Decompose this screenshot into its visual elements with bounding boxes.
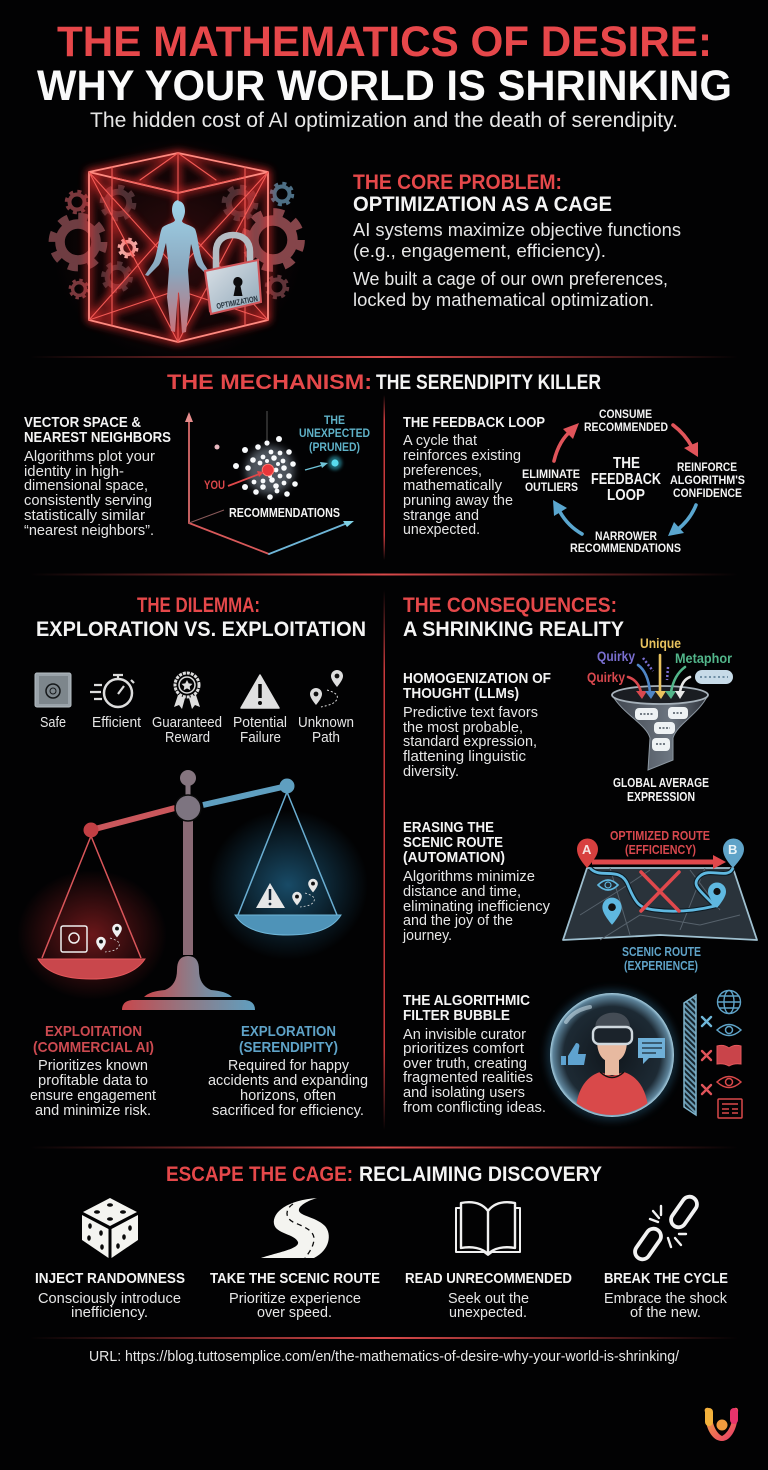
icon: blocked crosses [702, 1017, 711, 1094]
panel: algorithmic filter bubble text: over truth, creating [403, 1055, 527, 1072]
panel: homogenization of thought text: diversity. [403, 763, 459, 780]
panel: homogenization of thought text: Predictive text favors [403, 704, 538, 721]
diagram: feedback loop cycle: CONSUME [599, 407, 652, 421]
panel: vector space text: consistently serving [24, 492, 152, 509]
panel: feedback loop text [403, 414, 545, 538]
icon: safe [35, 673, 71, 731]
heading: the consequences: THE CONSEQUENCES: [403, 594, 617, 617]
panel: algorithmic filter bubble text: and isolating users [403, 1084, 525, 1101]
panel: read unrecommended: unexpected. [449, 1305, 527, 1321]
core problem body text: locked by mathematical optimization. [353, 290, 654, 310]
illustration: filter bubble [546, 989, 678, 1121]
heading: escape the cage [166, 1163, 602, 1186]
diagram: feedback loop cycle: OUTLIERS [525, 480, 578, 494]
panel: algorithmic filter bubble text: prioritizes comfort [403, 1040, 525, 1057]
panel: algorithmic filter bubble text: THE ALGORITHMIC [403, 992, 530, 1009]
heading: the dilemma: THE DILEMMA: [137, 594, 260, 617]
person in headset [575, 1013, 649, 1118]
panel: inject randomness: inefficiency. [71, 1305, 148, 1321]
panel: vector space text: “nearest neighbors”. [24, 522, 154, 539]
diagram: feedback loop cycle [522, 407, 745, 555]
panel: erasing the scenic route text [402, 819, 550, 944]
illustration: optimization cage with person and padlock [53, 138, 303, 362]
icon: warning triangle: Potential [233, 715, 287, 731]
recommendation points cluster [233, 436, 298, 500]
heading: the dilemma: EXPLORATION VS. EXPLOITATION [36, 618, 366, 641]
heading: the mechanism: THE MECHANISM: [167, 371, 372, 394]
panel: vector space text: statistically similar [24, 507, 145, 524]
panel: algorithmic filter bubble text: FILTER BUBBLE [403, 1007, 510, 1024]
panel: exploration: EXPLORATION [241, 1023, 336, 1040]
panel: erasing the scenic route text: ERASING THE [403, 819, 494, 836]
diagram: route map: (EFFICIENCY) [625, 843, 696, 857]
panel: exploitation: Prioritizes known [38, 1057, 148, 1074]
arrows: cycle [553, 423, 698, 536]
panel: inject randomness: INJECT RANDOMNESS [35, 1270, 185, 1287]
left pan: exploitation [38, 836, 145, 979]
panel: feedback loop text: pruning away the [403, 492, 513, 509]
panel: feedback loop text: THE FEEDBACK LOOP [403, 414, 545, 431]
icon: chat bubble [638, 1038, 665, 1064]
panel: exploration: (SERENDIPITY) [239, 1039, 338, 1056]
panel: algorithmic filter bubble text: from conflicting ideas. [403, 1099, 546, 1116]
panel: break the cycle: BREAK THE CYCLE [604, 1270, 728, 1287]
icon row: exploitation and exploration traits [35, 670, 354, 746]
padlock [205, 235, 261, 314]
panel: vector space text: dimensional space, [24, 477, 148, 494]
heading: the consequences: A SHRINKING REALITY [403, 618, 624, 641]
label: the unexpected pruned: UNEXPECTED [299, 426, 370, 440]
pin: A: A [582, 842, 592, 857]
label: the unexpected pruned: (PRUNED) [309, 440, 360, 454]
icon: reward ribbon: Reward [165, 730, 210, 746]
panel: erasing the scenic route text: distance and time, [403, 883, 521, 900]
logo [705, 1408, 738, 1441]
panel: vector space text: Algorithms plot your [24, 448, 155, 465]
diagram: funnel of expression: Quirky [587, 669, 625, 685]
diagram: funnel of expression: Metaphor [675, 650, 732, 666]
label: you: YOU [204, 478, 225, 492]
panel: algorithmic filter bubble text: fragmented realities [403, 1069, 533, 1086]
panel: read unrecommended [405, 1202, 572, 1321]
panel: erasing the scenic route text: journey. [402, 927, 452, 944]
title: WHY YOUR WORLD IS SHRINKING [37, 62, 732, 110]
panel: homogenization of thought text: THOUGHT (LLMs) [403, 685, 519, 702]
chart: balance scale [17, 770, 368, 1010]
diagram: funnel of expression: GLOBAL AVERAGE [613, 776, 709, 790]
diagram: feedback loop cycle: THE [613, 455, 640, 472]
panel: feedback loop text: strange and [403, 507, 479, 524]
core problem body text [353, 220, 681, 310]
icon: open book [456, 1202, 520, 1255]
diagram: feedback loop cycle: RECOMMENDED [584, 420, 668, 434]
diagram: route map: (EXPERIENCE) [624, 959, 698, 973]
heading: core problem [353, 171, 612, 216]
panel: vector space text [24, 414, 171, 539]
label: the unexpected pruned: THE [324, 413, 345, 427]
diagram: feedback loop cycle: ALGORITHM'S [670, 473, 745, 487]
panel: break the cycle: of the new. [630, 1305, 701, 1321]
panel: erasing the scenic route text: SCENIC ROUTE [403, 834, 503, 851]
diagram: funnel of expression: Quirky [597, 648, 635, 664]
bubble highlight [566, 1007, 590, 1022]
panel: vector space text: identity in high- [24, 463, 124, 480]
diagram: route map: SCENIC ROUTE [622, 945, 701, 959]
heading: the mechanism: THE SERENDIPITY KILLER [376, 371, 601, 394]
panel: exploitation: (COMMERCIAL AI) [33, 1039, 154, 1056]
person silhouette [145, 200, 212, 333]
panel: feedback loop text: mathematically [403, 477, 502, 494]
icon: safe: Safe [40, 715, 66, 731]
diagram: feedback loop cycle: REINFORCE [677, 460, 737, 474]
panel: feedback loop text: preferences, [403, 462, 482, 479]
icon: broken chain [632, 1194, 700, 1262]
icon: stopwatch: Efficient [92, 715, 141, 731]
diagram: feedback loop cycle: CONFIDENCE [673, 486, 742, 500]
title [37, 18, 732, 110]
heading: the mechanism [167, 371, 601, 394]
diagram: funnel of expression: EXPRESSION [627, 790, 695, 804]
panel: exploitation: profitable data to [38, 1072, 148, 1089]
panel: exploitation: EXPLOITATION [45, 1023, 142, 1040]
panel: exploitation: ensure engagement [30, 1087, 157, 1104]
pin: A [577, 839, 598, 868]
panel: homogenization of thought text [403, 670, 551, 780]
panel: core problem [353, 171, 681, 310]
panel: homogenization of thought text: flattening linguistic [403, 748, 526, 765]
panel: take the scenic route [210, 1198, 380, 1321]
panel: erasing the scenic route text: eliminating inefficiency [403, 898, 550, 915]
label: the unexpected pruned [299, 413, 370, 454]
panel: vector space text: NEAREST NEIGHBORS [24, 429, 171, 446]
panel: exploitation: and minimize risk. [35, 1102, 151, 1119]
icon: unknown path pins: Path [312, 730, 340, 746]
icon: book [717, 1045, 741, 1066]
icon: eye [717, 1076, 741, 1088]
filter wall with blocked items [684, 990, 742, 1118]
icon: warning triangle: Failure [240, 730, 281, 746]
pin: B [723, 839, 744, 868]
panel: erasing the scenic route text: and the joy of the [403, 912, 513, 929]
chart: vector space scatter [185, 411, 370, 554]
right pan: exploration [235, 792, 341, 935]
diagram: funnel of expression: Unique [640, 635, 681, 651]
panel: break the cycle [604, 1194, 728, 1321]
heading: the dilemma [36, 594, 366, 641]
icon: warning triangle [233, 675, 287, 746]
panel: algorithmic filter bubble text: An invisible curator [403, 1026, 526, 1043]
panel: exploration: Required for happy [228, 1057, 349, 1074]
panel: erasing the scenic route text: (AUTOMATION) [403, 849, 505, 866]
icon: newspaper [718, 1099, 742, 1118]
core problem body text: AI systems maximize objective functions [353, 220, 681, 240]
panel: inject randomness [35, 1198, 185, 1321]
panel: homogenization of thought text: standard expression, [403, 733, 537, 750]
panel: homogenization of thought text: HOMOGENIZATION OF [403, 670, 551, 687]
label: recommendations: RECOMMENDATIONS [229, 505, 340, 520]
panel: break the cycle: Embrace the shock [604, 1291, 728, 1307]
padlock: OPTIMIZATION [216, 294, 259, 311]
panel: take the scenic route: TAKE THE SCENIC ROUTE [210, 1270, 380, 1287]
panel: exploration: horizons, often [240, 1087, 336, 1104]
title: THE MATHEMATICS OF DESIRE: [57, 18, 712, 66]
icon: reward ribbon: Guaranteed [152, 715, 222, 731]
diagram: route map [563, 829, 757, 973]
icon: winding road [261, 1198, 329, 1258]
heading: escape the cage: ESCAPE THE CAGE: [166, 1163, 353, 1186]
panel: feedback loop text: reinforces existing [403, 447, 521, 464]
panel: vector space text: VECTOR SPACE & [24, 414, 141, 431]
diagram: funnel of expression [587, 635, 733, 804]
diagram: feedback loop cycle: RECOMMENDATIONS [570, 541, 681, 555]
icon: unknown path pins [298, 670, 354, 746]
panel: homogenization of thought text: the most probable, [403, 719, 523, 736]
heading: core problem: OPTIMIZATION AS A CAGE [353, 193, 612, 216]
subtitle: The hidden cost of AI optimization and the death of serendipity. [90, 108, 678, 132]
diagram: feedback loop cycle: ELIMINATE [522, 467, 580, 481]
panel: inject randomness: Consciously introduce [38, 1291, 181, 1307]
panel: erasing the scenic route text: Algorithms minimize [403, 868, 535, 885]
panel: read unrecommended: READ UNRECOMMENDED [405, 1270, 572, 1287]
icon: eye [717, 1024, 741, 1036]
heading: core problem: THE CORE PROBLEM: [353, 171, 562, 194]
panel: exploration [208, 1023, 368, 1119]
icon: globe [718, 990, 740, 1014]
panel: take the scenic route: over speed. [257, 1305, 332, 1321]
core problem body text: We built a cage of our own preferences, [353, 269, 668, 289]
panel: algorithmic filter bubble text [403, 992, 546, 1116]
diagram: feedback loop cycle: LOOP [607, 487, 645, 504]
core problem body text: (e.g., engagement, efficiency). [353, 241, 606, 261]
panel: take the scenic route: Prioritize experience [229, 1291, 361, 1307]
icon: dice [82, 1198, 138, 1258]
diagram: feedback loop cycle: FEEDBACK [591, 471, 662, 488]
diagram: feedback loop cycle: NARROWER [595, 529, 657, 543]
pin: B: B [728, 842, 737, 857]
source url: URL: https://blog.tuttosemplice.com/en/the-mathematics-of-desire-why-your-world-is-shrinking/ [89, 1349, 680, 1365]
diagram: route map: OPTIMIZED ROUTE [610, 829, 710, 843]
panel: exploration: sacrificed for efficiency. [212, 1102, 364, 1119]
icon: reward ribbon [152, 673, 222, 746]
panel: feedback loop text: A cycle that [403, 432, 478, 449]
panel: exploration: accidents and expanding [208, 1072, 368, 1089]
heading: escape the cage: RECLAIMING DISCOVERY [359, 1163, 602, 1186]
panel: feedback loop text: unexpected. [403, 521, 480, 538]
panel: exploitation [30, 1023, 157, 1119]
icon: thumbs up [561, 1043, 586, 1065]
beam and stand [84, 770, 294, 1010]
heading: the consequences [403, 594, 624, 641]
icon: stopwatch [90, 675, 141, 731]
panel: read unrecommended: Seek out the [448, 1291, 529, 1307]
icon: unknown path pins: Unknown [298, 715, 354, 731]
